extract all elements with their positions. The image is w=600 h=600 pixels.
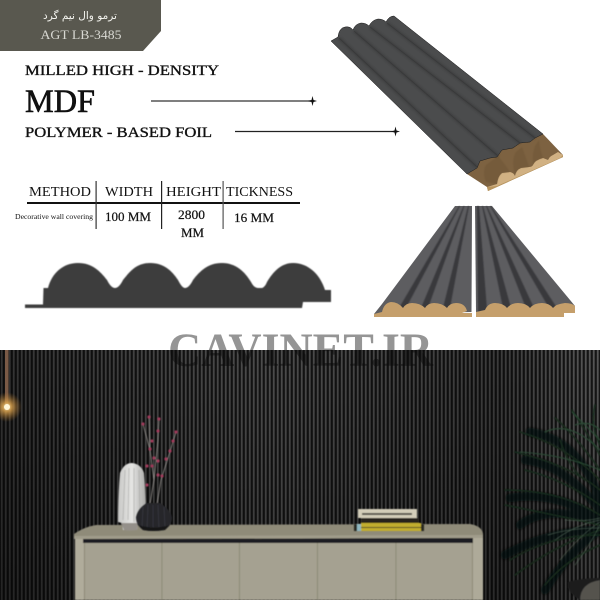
pair of panels in perspective [374, 206, 575, 317]
table values: 2800 [178, 208, 205, 222]
table values: MM [181, 226, 204, 240]
pendant lamp [0, 350, 22, 422]
left panel in perspective [374, 206, 472, 317]
table headers: WIDTH [105, 184, 153, 199]
slatted wall [0, 350, 600, 600]
stack of books [354, 509, 424, 531]
foil face of panel [331, 16, 543, 174]
table headers: HEIGHT [166, 184, 222, 199]
main 3D panel [331, 16, 563, 191]
watermark: CAVINET.IR [168, 324, 434, 377]
panel grooves [339, 23, 535, 167]
material label: milled high-density: MILLED HIGH - DENSITY [25, 63, 219, 79]
table values [15, 208, 274, 240]
plant pot [568, 578, 600, 600]
table headers: METHOD [29, 184, 91, 199]
wood end of panel [467, 134, 563, 191]
header tag [0, 0, 161, 51]
dark ribbed vase [136, 503, 172, 531]
white pleated vase [118, 463, 146, 530]
branches with berries [141, 415, 178, 504]
arrow: MDF to panel [151, 96, 317, 106]
specification table [15, 181, 300, 240]
table values: 100 MM [105, 210, 151, 224]
room photo [0, 350, 600, 600]
material label: polymer foil: POLYMER - BASED FOIL [25, 125, 212, 141]
header Persian title: ترمو وال نیم گرد [43, 9, 117, 22]
table headers [29, 184, 293, 199]
table values: Decorative wall covering [15, 213, 94, 221]
right panel in perspective [475, 206, 575, 317]
arrow: foil to panel [235, 126, 400, 136]
table headers: TICKNESS [226, 184, 293, 199]
material label: MDF: MDF [25, 84, 95, 120]
potted palm plant [505, 405, 600, 590]
table values: 16 MM [234, 211, 274, 225]
sideboard [74, 524, 483, 600]
header model code: AGT LB-3485 [40, 27, 122, 42]
panel cross-section profile [25, 263, 331, 308]
